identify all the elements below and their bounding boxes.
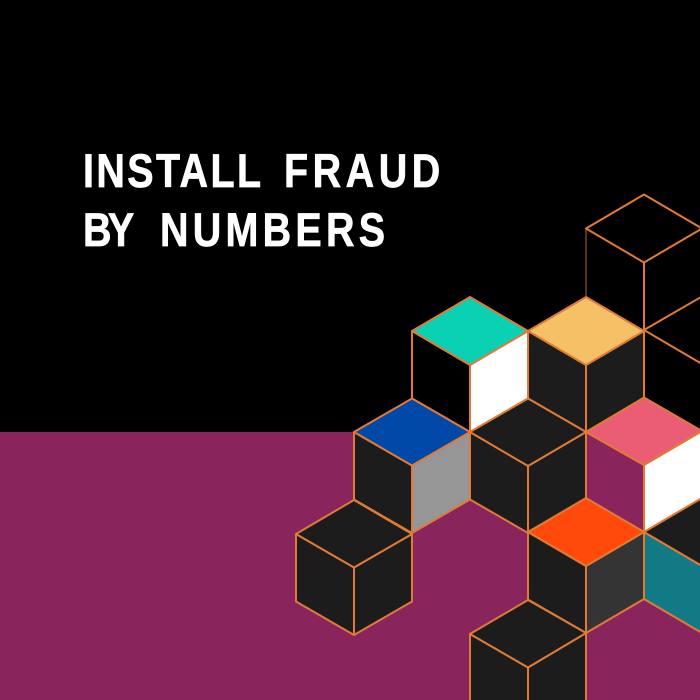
title: BY xyxy=(83,205,134,257)
title: NUMBERS xyxy=(160,205,385,257)
background: purple lower panel xyxy=(0,432,700,700)
cube: wireframe top right xyxy=(586,194,700,364)
cube: dark centre xyxy=(470,398,586,533)
cube: dark lower left xyxy=(296,500,412,635)
title: INSTALL xyxy=(83,146,261,198)
cube: teal top with white face xyxy=(412,297,528,432)
cube: pink top with white face xyxy=(586,398,700,532)
isometric cube cluster xyxy=(296,194,700,700)
cube: blue top with grey face xyxy=(354,398,470,533)
cube: yellow top xyxy=(528,297,644,432)
title xyxy=(83,146,440,257)
cube: orange top xyxy=(528,498,644,633)
title: FRAUD xyxy=(284,146,440,198)
cube: dark bottom, cropped by page xyxy=(470,600,586,700)
cube: dark top with teal face, right edge xyxy=(644,498,700,633)
background: black upper panel xyxy=(0,0,700,432)
